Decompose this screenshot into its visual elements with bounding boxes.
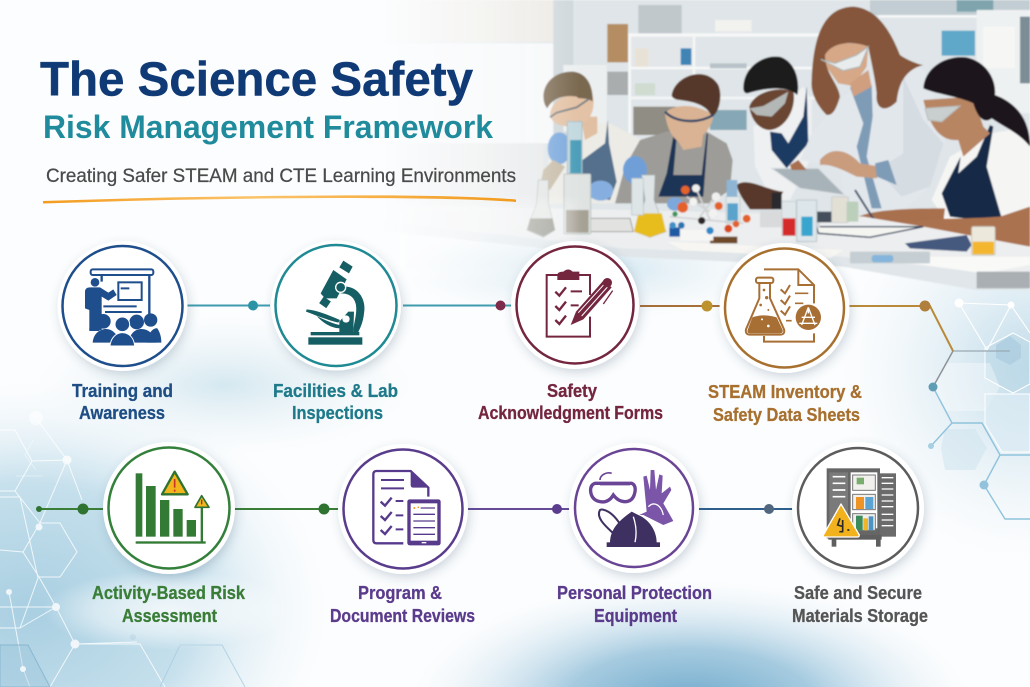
step: safety acknowledgment forms <box>478 241 663 423</box>
table and lab equipment <box>472 172 1030 290</box>
title line one: The Science Safety <box>40 54 473 106</box>
label: Safety <box>547 380 598 401</box>
step: safe and secure materials storage: Materials Storage <box>792 605 928 626</box>
student four <box>855 57 1030 250</box>
step: steam inventory and safety data sheets: Safety Data Sheets <box>713 404 860 425</box>
icon: storage cabinet with warning sign <box>823 468 896 547</box>
label: Program & <box>358 582 442 603</box>
label: Training and <box>72 380 173 401</box>
student one <box>540 72 642 203</box>
icon: flask and data sheet <box>746 269 821 342</box>
student three <box>737 57 812 209</box>
connector lines row two <box>36 504 795 514</box>
student two <box>615 74 733 211</box>
step: program and document reviews <box>330 444 475 626</box>
step: activity-based risk assessment <box>43 442 293 650</box>
step: facilities and lab inspections <box>271 240 401 423</box>
label: Activity-Based Risk <box>92 582 246 603</box>
icon: goggles, gloves and hard hat <box>591 470 673 547</box>
icon: presenter and audience <box>85 269 161 346</box>
orange underline <box>43 195 516 204</box>
step: personal protection equipment: Equipment <box>594 605 677 626</box>
connector lines row one <box>187 300 953 351</box>
label: Facilities & Lab <box>273 380 398 401</box>
label: Safe and Secure <box>794 582 922 603</box>
photo: students in science lab <box>456 0 1030 290</box>
step: training and awareness: Awareness <box>79 402 165 423</box>
step: activity-based risk assessment: Assessment <box>122 605 217 626</box>
white fade on table left edge <box>395 200 575 280</box>
title block <box>40 54 516 204</box>
teacher <box>772 7 945 210</box>
icon: bar chart with warnings <box>136 472 209 544</box>
hexagon network: right <box>928 298 1030 519</box>
step: training and awareness <box>58 241 188 423</box>
hexagon network: bottom left <box>0 411 245 687</box>
title line two: Risk Management Framework <box>43 109 493 145</box>
label: STEAM Inventory & <box>708 381 862 402</box>
subtitle: Creating Safer STEAM and CTE Learning Environments <box>46 165 516 187</box>
lab wall and shelves <box>456 0 1030 216</box>
icon: documents and tablet <box>373 471 441 545</box>
step: facilities and lab inspections: Inspections <box>292 402 383 423</box>
icon: clipboard and pen <box>547 269 613 337</box>
step: program and document reviews: Document Reviews <box>330 605 475 626</box>
step: personal protection equipment <box>557 443 712 626</box>
step: safe and secure materials storage <box>792 442 928 626</box>
step: steam inventory and safety data sheets <box>708 243 862 425</box>
icon: microscope <box>306 261 364 345</box>
step: safety acknowledgment forms: Acknowledgment Forms <box>478 402 663 423</box>
label: Personal Protection <box>557 582 712 603</box>
